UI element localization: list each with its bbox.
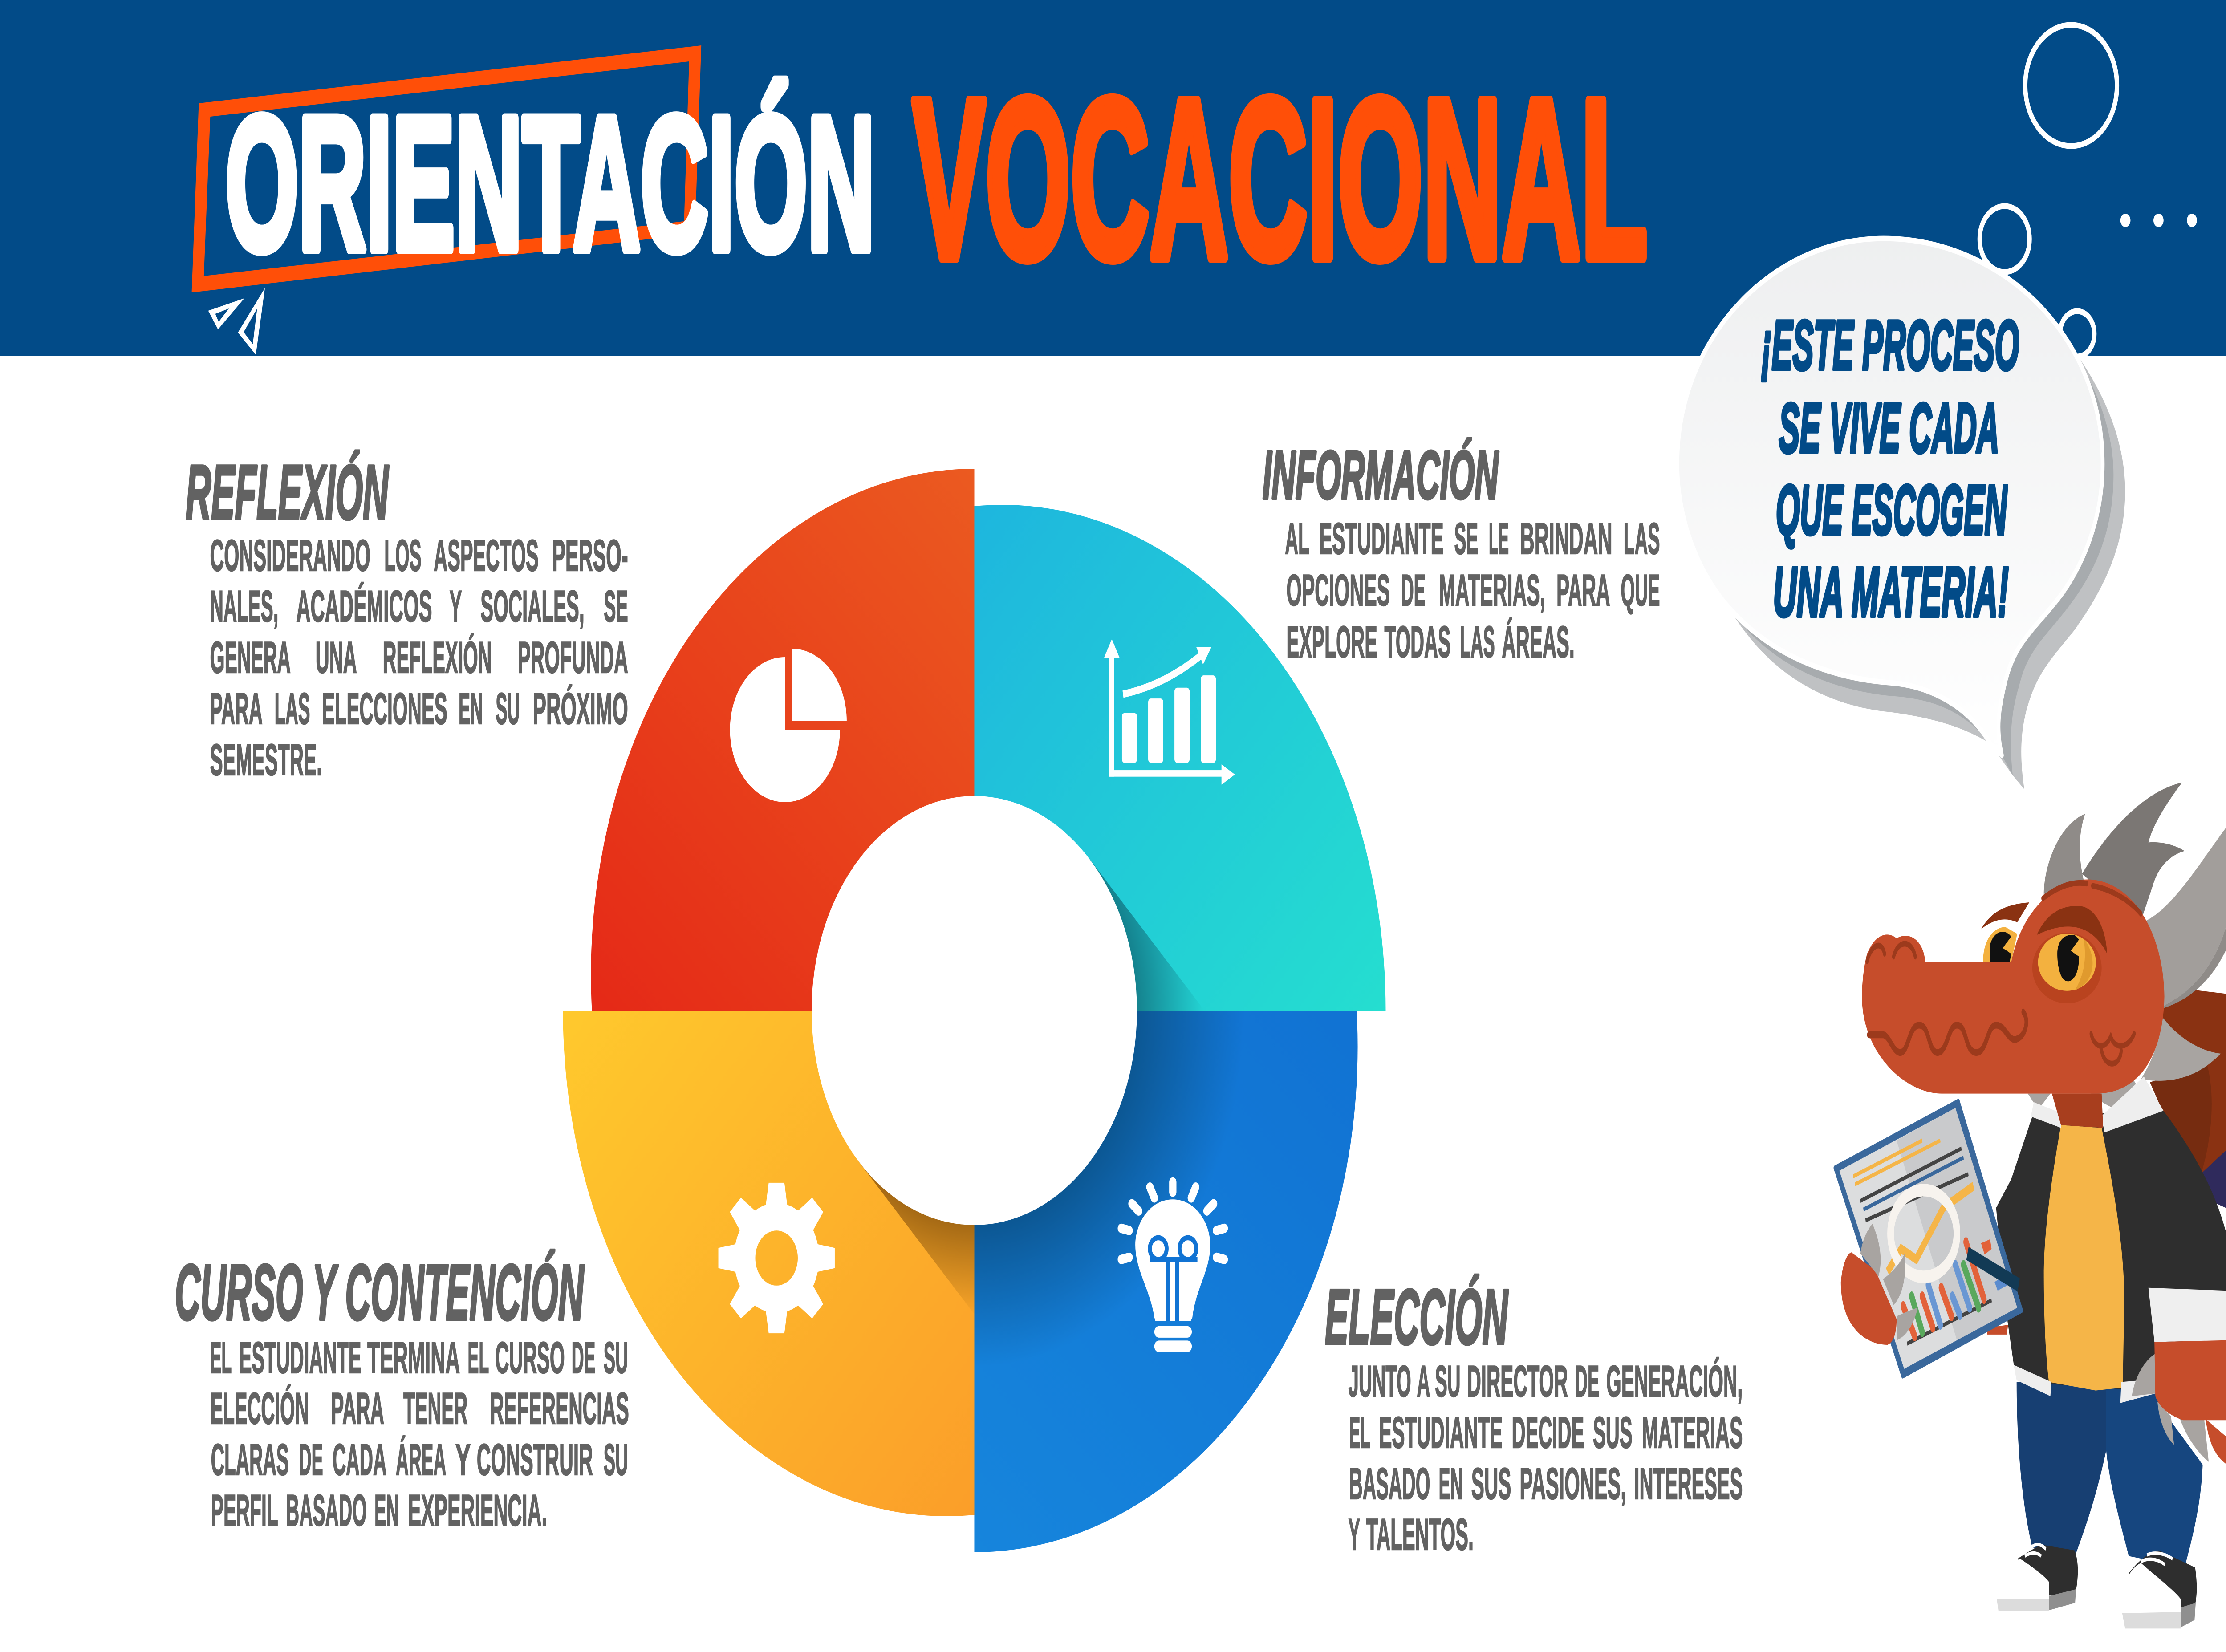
text: curso body: DE	[299, 1435, 323, 1484]
text: reflexión body: PARA	[210, 685, 263, 734]
wing	[2150, 990, 2226, 1208]
tablet	[1835, 1101, 2022, 1376]
title: VOCACIONAL	[913, 52, 1648, 305]
text: reflexión body	[210, 532, 628, 785]
text: curso body: REFERENCIAS	[490, 1384, 629, 1433]
text: elección body: SUS	[1593, 1408, 1633, 1457]
text: curso body: SU	[604, 1333, 628, 1382]
text: reflexión body: Y	[450, 582, 462, 631]
quadrant: teal	[974, 505, 1385, 1011]
text: elección body: EL	[1349, 1408, 1370, 1457]
left shoe	[1996, 1545, 2078, 1611]
text: curso body: ÁREA	[396, 1435, 446, 1484]
text: información body: AL	[1285, 514, 1309, 564]
head line	[1867, 883, 2141, 961]
quadrant: red	[591, 469, 974, 1011]
heading: información: INFORMACIÓN	[1263, 436, 1499, 513]
text: reflexión body: SEMESTRE.	[210, 736, 322, 785]
neck	[2052, 1094, 2103, 1128]
shirt	[2044, 1125, 2124, 1391]
left sleeve	[1987, 1325, 2008, 1335]
text: curso body	[210, 1333, 629, 1535]
title frame	[192, 45, 701, 292]
text: curso body: PERFIL	[211, 1486, 278, 1535]
text: reflexión body: SE	[604, 582, 628, 631]
quadrant: yellow	[563, 1011, 974, 1516]
head	[1862, 879, 2165, 1094]
magnifier	[1891, 1190, 2019, 1285]
shadow on teal	[974, 859, 1204, 1011]
text: curso body: EXPERIENCIA.	[408, 1486, 547, 1535]
mascot: dragon	[1835, 783, 2226, 1628]
text: información body: ÁREAS.	[1502, 617, 1575, 667]
text: elección body: SUS	[1471, 1459, 1511, 1508]
heading: elección: ELECCIÓN	[1325, 1274, 1509, 1361]
center circle	[812, 796, 1137, 1225]
text: elección body: JUNTO	[1349, 1357, 1411, 1406]
text: curso body: CADA	[333, 1435, 386, 1484]
text: información body: PARA	[1556, 565, 1610, 615]
text: información body: LAS	[1624, 514, 1660, 564]
shadow on yellow	[859, 1011, 974, 1314]
text: elección body: INTERESES	[1634, 1459, 1743, 1508]
shadow on blue	[974, 1011, 1231, 1351]
text: reflexión body: ACADÉMICOS	[296, 582, 432, 631]
text: información body: BRINDAN	[1520, 514, 1613, 564]
section: información	[1263, 436, 1660, 667]
pants	[2017, 1382, 2203, 1567]
icon: pie chart	[730, 649, 847, 802]
text: curso body: ELECCIÓN	[210, 1384, 309, 1433]
bubble text: QUE ESCOGEN	[1776, 471, 2007, 549]
text: elección body: BASADO	[1349, 1459, 1430, 1508]
bubble text: SE VIVE CADA	[1779, 389, 1999, 467]
speech bubble	[1677, 239, 2125, 789]
text: información body: OPCIONES	[1287, 565, 1390, 615]
text: curso body: SU	[604, 1435, 628, 1484]
text: reflexión body: UNA	[316, 633, 357, 682]
text: curso body: EN	[374, 1486, 399, 1535]
text: curso body: EL	[467, 1333, 489, 1382]
title: ORIENTACIÓN	[225, 77, 875, 290]
near eye	[2038, 934, 2096, 991]
text: información body: EXPLORE	[1287, 617, 1377, 667]
bubble text: ¡ESTE PROCESO	[1761, 306, 2019, 385]
text: elección body: Y	[1349, 1510, 1360, 1559]
tablet bars	[1903, 1242, 1984, 1336]
section: curso y contención	[175, 1249, 629, 1535]
heading: curso y contención: CURSO Y CONTENCIÓN	[175, 1249, 585, 1336]
bubble text	[1761, 306, 2019, 631]
text: elección body: MATERIAS	[1642, 1408, 1743, 1457]
text: reflexión body: NALES,	[210, 582, 278, 631]
text: elección body: DE	[1575, 1357, 1599, 1406]
text: curso body: EL	[210, 1333, 232, 1382]
text: reflexión body: LAS	[275, 685, 310, 734]
text: curso body: PARA	[331, 1384, 384, 1433]
text: reflexión body: EN	[459, 685, 483, 734]
text: elección body: TALENTOS.	[1366, 1510, 1474, 1559]
text: reflexión body: SOCIALES,	[480, 582, 585, 631]
text: reflexión body: ASPECTOS	[434, 532, 539, 580]
text: reflexión body: PRÓXIMO	[533, 684, 628, 734]
section: elección	[1325, 1274, 1743, 1559]
chin mark	[2091, 1034, 2134, 1063]
collars and hem	[2014, 1076, 2164, 1403]
far eye	[1981, 902, 2029, 962]
text: elección body: EN	[1439, 1459, 1463, 1508]
icon: gear	[719, 1183, 835, 1333]
text: elección body: SU	[1435, 1357, 1461, 1406]
text: curso body: BASADO	[286, 1486, 367, 1535]
text: elección body: A	[1417, 1357, 1430, 1406]
text: información body: MATERIAS,	[1439, 565, 1545, 615]
text: elección body: DIRECTOR	[1467, 1357, 1568, 1406]
text: información body	[1285, 514, 1660, 667]
text: reflexión body: PERSO-	[552, 532, 628, 580]
text: curso body: ESTUDIANTE	[239, 1333, 361, 1382]
right shoe	[2121, 1551, 2197, 1628]
eye patch	[2032, 933, 2102, 1003]
text: elección body: PASIONES,	[1519, 1459, 1626, 1508]
text: elección body	[1349, 1357, 1743, 1559]
text: reflexión body: GENERA	[210, 633, 291, 682]
right arm cuff	[2132, 1288, 2226, 1464]
text: curso body: TERMINA	[367, 1333, 460, 1382]
bubble text: UNA MATERIA!	[1773, 552, 2009, 631]
text: información body: QUE	[1621, 565, 1660, 615]
tablet trend line	[1888, 1186, 1974, 1272]
text: información body: SE	[1454, 514, 1478, 564]
text: reflexión body: CONSIDERANDO	[210, 532, 370, 580]
text: curso body: DE	[572, 1333, 595, 1382]
horns	[2028, 783, 2226, 1114]
text: información body: LAS	[1460, 617, 1495, 667]
text: información body: DE	[1401, 565, 1426, 615]
section: reflexión	[186, 449, 628, 785]
bubble shape	[1677, 239, 2125, 789]
cycle wheel	[563, 469, 1385, 1552]
icon: light bulb	[1121, 1182, 1224, 1352]
text: información body: TODAS	[1385, 617, 1450, 667]
title	[225, 52, 1648, 305]
text: reflexión body: ELECCIONES	[322, 685, 447, 734]
quadrant: blue	[974, 1011, 1358, 1552]
decorative circles and dots	[1980, 25, 2197, 357]
text: curso body: TENER	[403, 1384, 467, 1433]
text: curso body: Y	[455, 1435, 471, 1484]
text: reflexión body: PROFUNDA	[518, 633, 628, 682]
text: reflexión body: LOS	[384, 532, 422, 580]
icon: paper planes	[208, 288, 265, 355]
text: curso body: CURSO	[495, 1333, 565, 1382]
left hand	[1841, 1224, 1918, 1345]
text: información body: ESTUDIANTE	[1319, 514, 1444, 564]
text: elección body: GENERACIÓN,	[1606, 1357, 1743, 1406]
icon: bar chart	[1104, 639, 1235, 785]
text: elección body: DECIDE	[1512, 1408, 1584, 1457]
text: curso body: CONSTRUIR	[477, 1435, 593, 1484]
text: elección body: ESTUDIANTE	[1379, 1408, 1503, 1457]
text: reflexión body: REFLEXIÓN	[383, 633, 492, 682]
text: reflexión body: SU	[496, 685, 520, 734]
tablet lines	[1853, 1141, 1991, 1344]
header band	[0, 0, 2226, 356]
brow	[2037, 906, 2107, 954]
heading: reflexión: REFLEXIÓN	[186, 449, 389, 536]
text: información body: LE	[1489, 514, 1509, 564]
mouth	[1869, 1012, 2026, 1052]
text: curso body: CLARAS	[211, 1435, 289, 1484]
jacket	[1996, 1111, 2226, 1399]
